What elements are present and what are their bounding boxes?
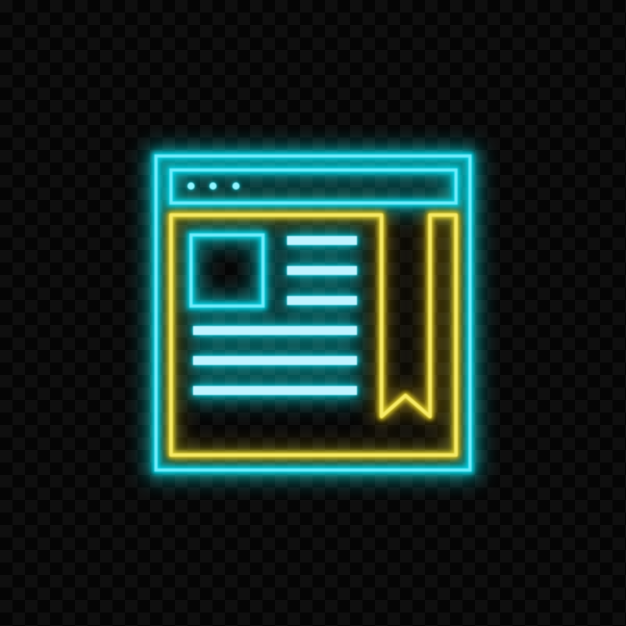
address bar dots xyxy=(187,182,240,190)
window frame and address bar xyxy=(156,156,470,470)
text lines xyxy=(193,236,357,395)
yellow page outline with bookmark ribbon xyxy=(171,215,456,455)
ambient glow xyxy=(156,156,470,470)
